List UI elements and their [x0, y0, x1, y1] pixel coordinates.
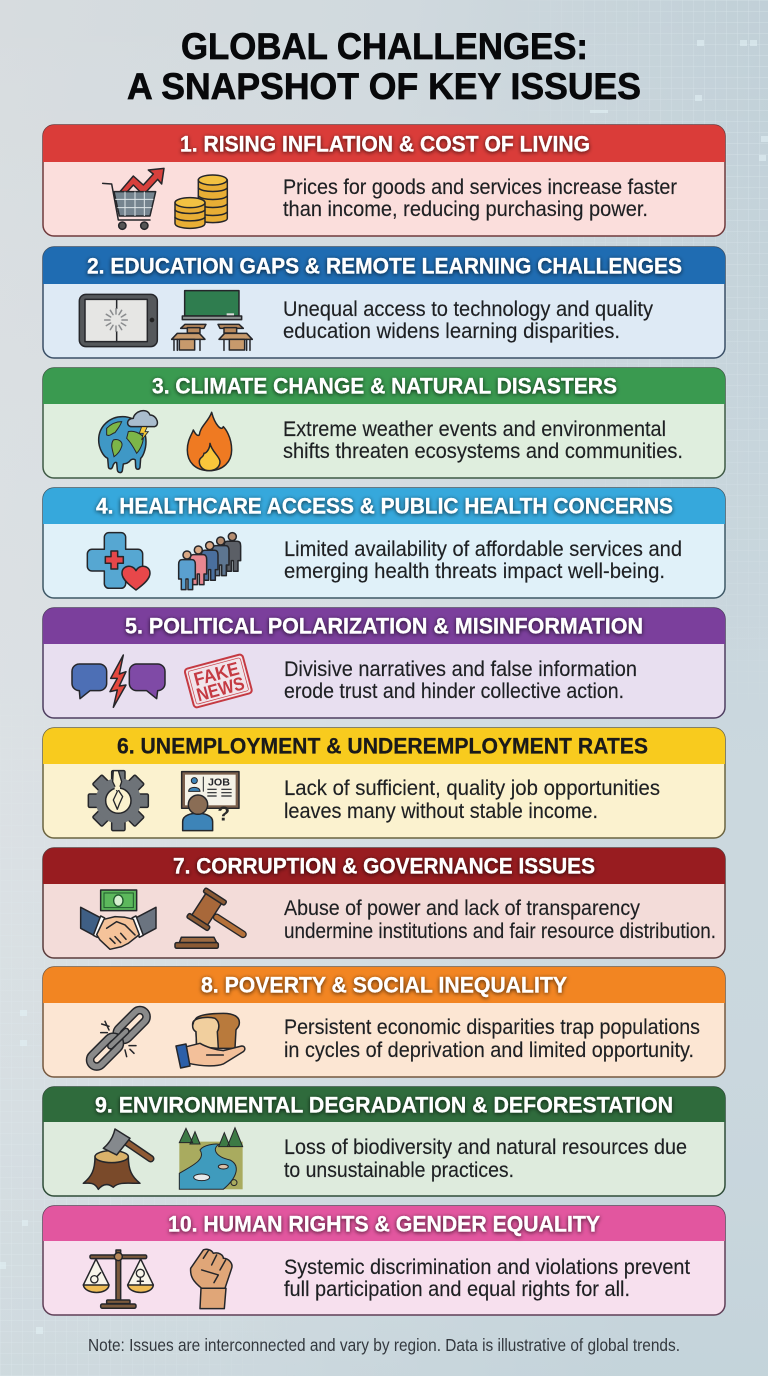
heading 4: 4. HEALTHCARE ACCESS & PUBLIC HEALTH CONCERNS	[96, 494, 673, 518]
heading 6: 6. UNEMPLOYMENT & UNDEREMPLOYMENT RATES	[117, 734, 648, 758]
icon: queue of people	[179, 533, 241, 590]
icon: tablet with loading spinner	[79, 294, 157, 347]
title	[127, 26, 641, 107]
icon: broken gear	[88, 771, 148, 831]
icon: shopping cart with rising arrow	[103, 168, 164, 229]
panel 2: education	[43, 247, 725, 358]
description 1: Prices for goods and services increase faster	[283, 175, 677, 199]
description 9: to unsustainable practices.	[284, 1158, 514, 1182]
panel 1: inflation	[43, 125, 725, 236]
description 4: emerging health threats impact well-being.	[284, 559, 665, 583]
icon: fake news stamp: FAKE	[191, 658, 241, 690]
description 5: erode trust and hinder collective action.	[284, 679, 624, 703]
heading 7: 7. CORRUPTION & GOVERNANCE ISSUES	[173, 854, 595, 878]
panel 8: poverty	[43, 967, 725, 1077]
icon: medical cross and heart	[87, 533, 150, 590]
description 7	[284, 896, 716, 943]
icon: handshake with cash	[81, 890, 156, 949]
panel 3: climate	[43, 368, 725, 478]
heading 8: 8. POVERTY & SOCIAL INEQUALITY	[201, 972, 567, 998]
icon: fake news stamp: NEWS	[194, 672, 247, 705]
description 1: than income, reducing purchasing power.	[283, 197, 648, 221]
description 6	[284, 776, 660, 823]
description 3: Extreme weather events and environmental	[283, 417, 666, 441]
panel 10: human rights	[43, 1206, 725, 1315]
icon: job board and applicant: JOB	[208, 778, 230, 789]
panel 5: polarization	[43, 608, 725, 718]
description 5	[284, 657, 637, 703]
title: GLOBAL CHALLENGES:	[181, 26, 588, 67]
icon: clashing speech bubbles	[72, 655, 165, 707]
heading 5: 5. POLITICAL POLARIZATION & MISINFORMATION	[125, 614, 643, 638]
description 8	[284, 1015, 700, 1062]
description 7: undermine institutions and fair resource distribution.	[284, 919, 716, 943]
description 1	[283, 175, 677, 221]
heading 1: 1. RISING INFLATION & COST OF LIVING	[180, 132, 590, 156]
icon: balance scales with gender symbols	[83, 1250, 153, 1308]
description 9	[284, 1135, 687, 1182]
heading 3: 3. CLIMATE CHANGE & NATURAL DISASTERS	[152, 374, 617, 398]
icon: axe in tree stump	[83, 1129, 151, 1189]
description 2	[283, 297, 653, 343]
description 10: Systemic discrimination and violations prevent	[284, 1255, 690, 1279]
icon: job board and applicant	[182, 772, 239, 831]
heading 9: 9. ENVIRONMENTAL DEGRADATION & DEFORESTATION	[95, 1092, 673, 1118]
description 4	[284, 537, 682, 583]
icon: coin stacks	[175, 175, 227, 228]
description 3	[283, 417, 683, 463]
icon: gavel	[175, 888, 243, 948]
panel 6: unemployment	[43, 728, 725, 838]
panel 7: corruption	[43, 848, 725, 958]
description 10	[284, 1255, 690, 1301]
title: A SNAPSHOT OF KEY ISSUES	[127, 66, 641, 107]
footnote: Note: Issues are interconnected and vary by region. Data is illustrative of global trends.	[88, 1335, 680, 1355]
description 10: full participation and equal rights for all.	[284, 1277, 630, 1301]
description 2: Unequal access to technology and quality	[283, 297, 653, 321]
icon: broken chain	[87, 1007, 149, 1069]
description 6: Lack of sufficient, quality job opportunities	[284, 776, 660, 800]
icon: river landscape with forest	[179, 1128, 243, 1189]
panel 9: environment	[43, 1087, 725, 1196]
icon: fake news stamp	[184, 654, 252, 708]
panel 4: healthcare	[43, 488, 725, 598]
icon: melting globe with storm cloud	[99, 411, 157, 473]
heading 2: 2. EDUCATION GAPS & REMOTE LEARNING CHALLENGES	[87, 254, 682, 278]
description 5: Divisive narratives and false information	[284, 657, 637, 681]
description 9: Loss of biodiversity and natural resources due	[284, 1135, 687, 1159]
icon: raised fist	[191, 1249, 232, 1309]
description 7: Abuse of power and lack of transparency	[284, 896, 640, 920]
icon: classroom with chalkboard	[172, 291, 252, 350]
description 6: leaves many without stable income.	[284, 799, 598, 823]
description 2: education widens learning disparities.	[283, 319, 620, 343]
description 8: in cycles of deprivation and limited opportunity.	[284, 1038, 694, 1062]
description 8: Persistent economic disparities trap populations	[284, 1015, 700, 1039]
icon: job board and applicant: ?	[217, 803, 230, 826]
description 3: shifts threaten ecosystems and communities.	[283, 439, 683, 463]
icon: flame	[187, 412, 232, 471]
heading 10: 10. HUMAN RIGHTS & GENDER EQUALITY	[168, 1212, 600, 1236]
icon: bread in open hand	[176, 1013, 245, 1068]
description 4: Limited availability of affordable services and	[284, 537, 682, 561]
